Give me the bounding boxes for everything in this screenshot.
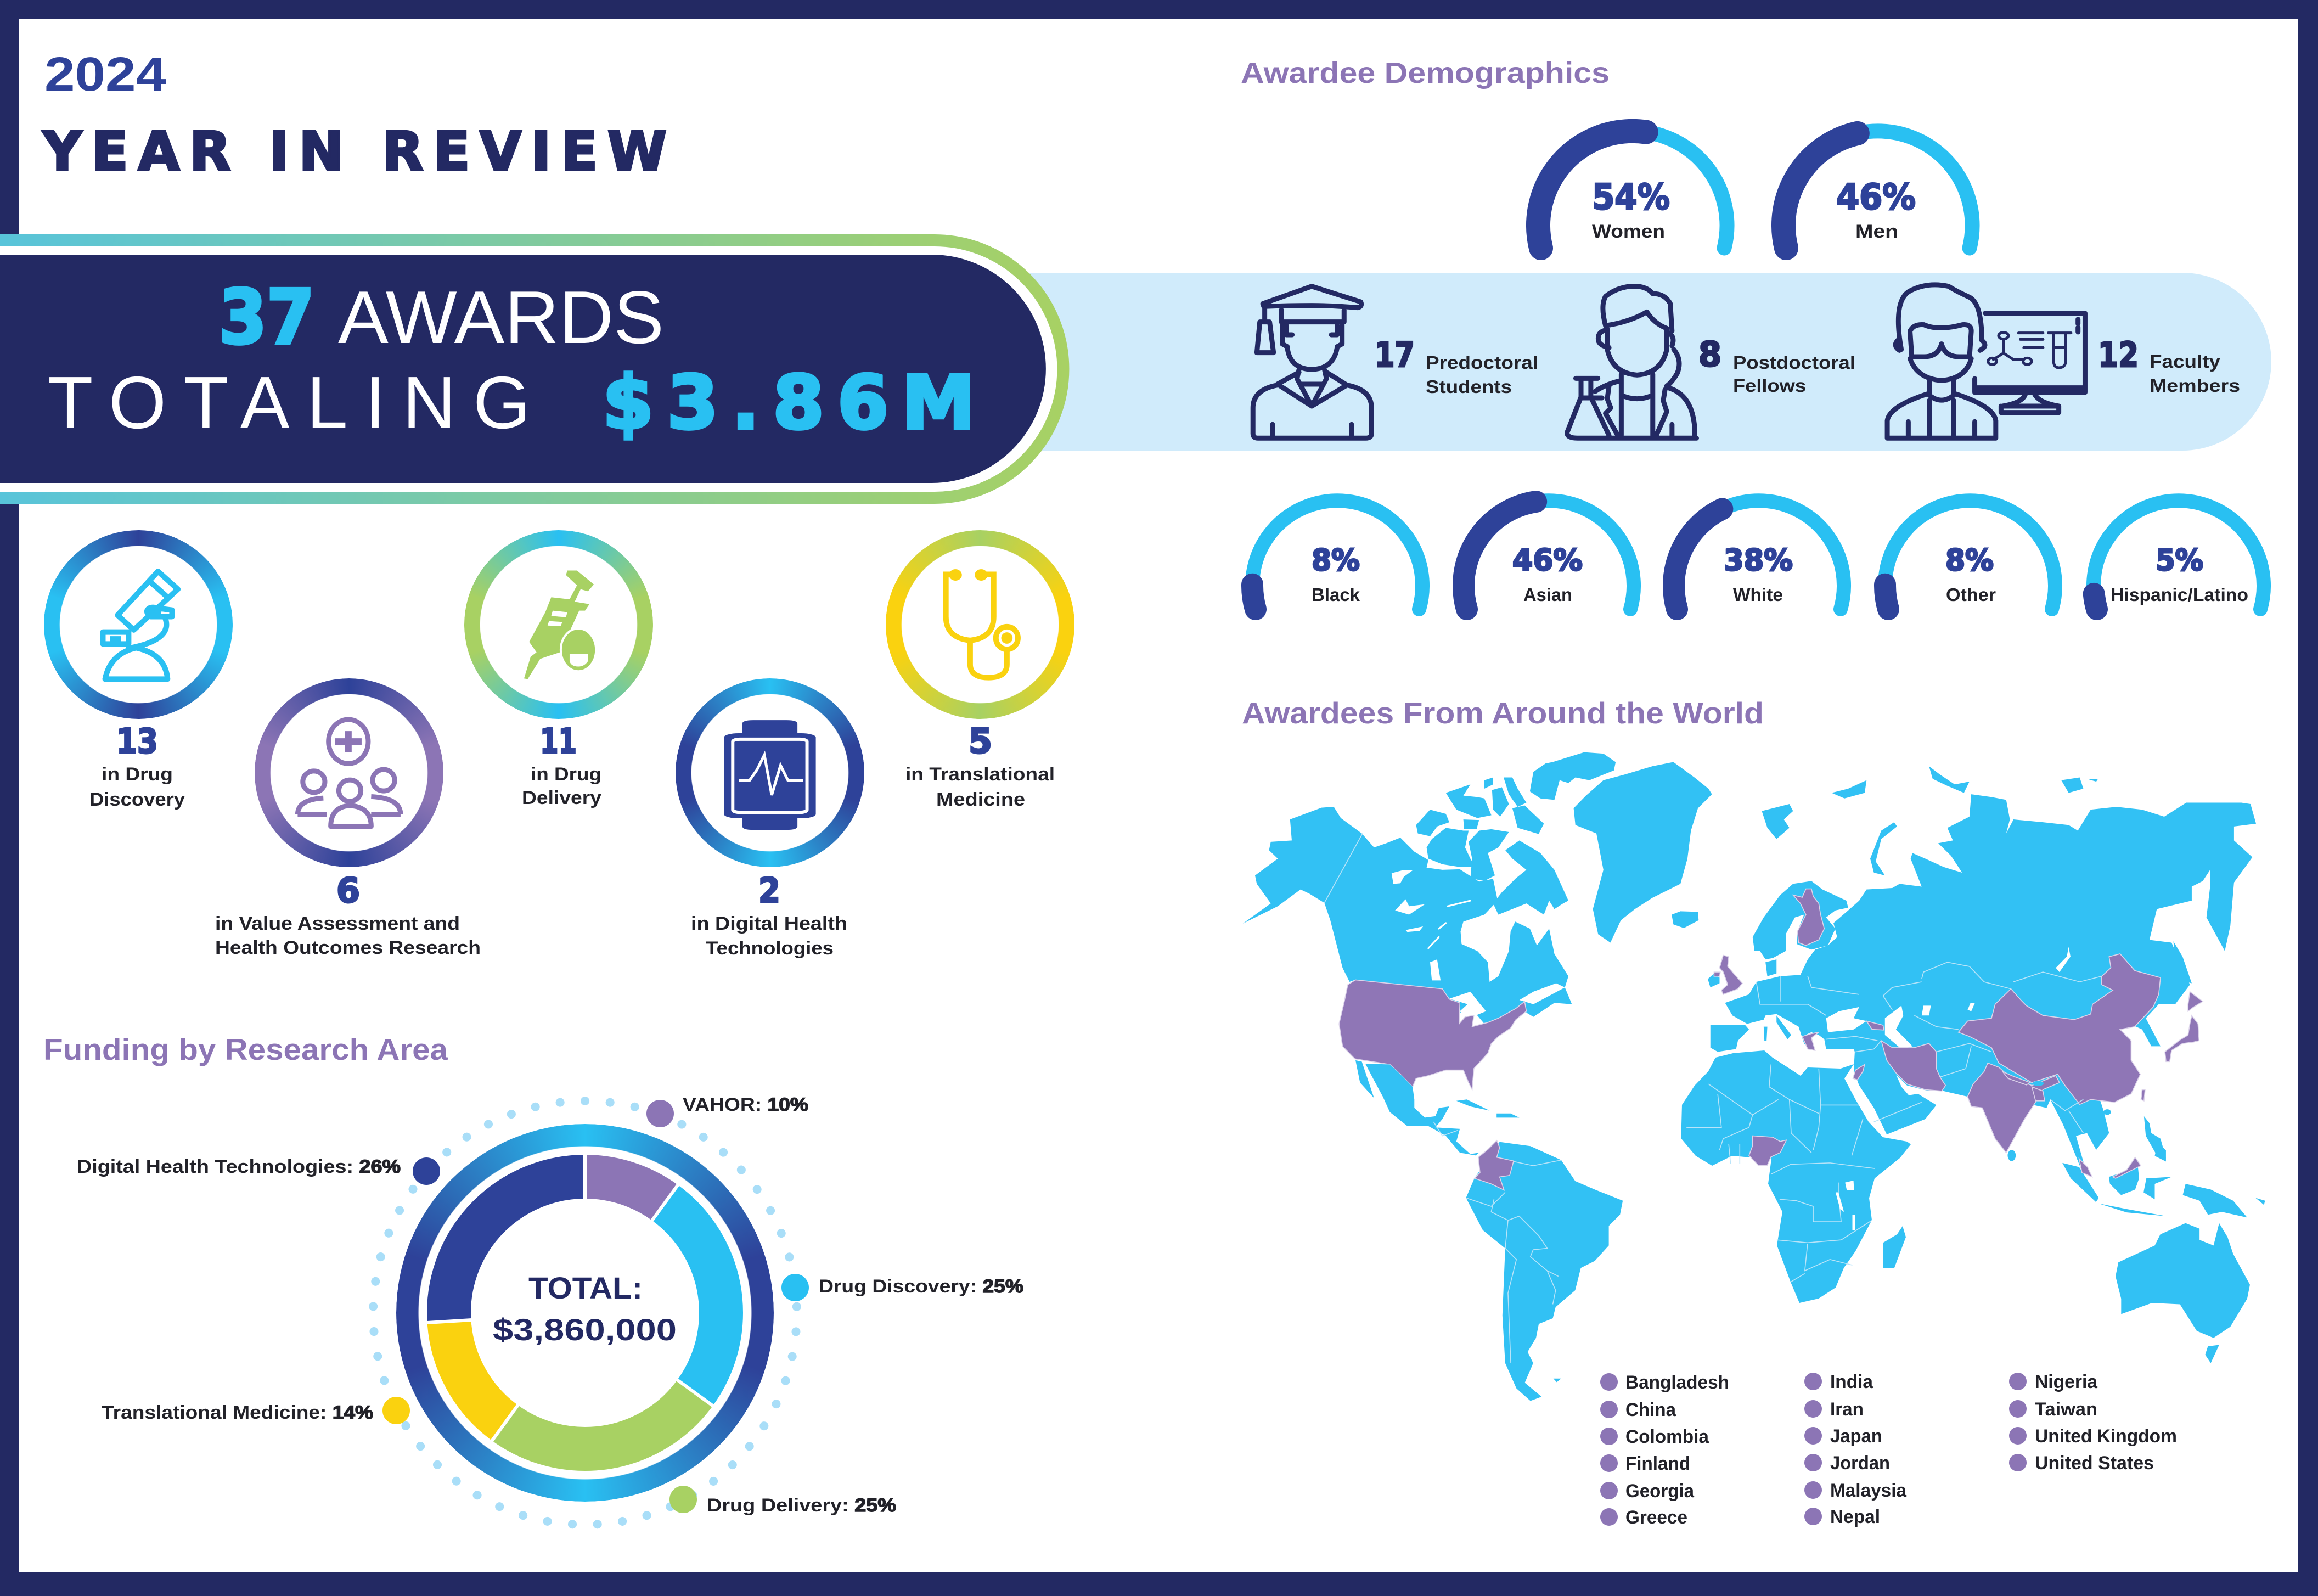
gauge: asian: Asian — [1523, 585, 1572, 605]
stat: drug discovery: in Drug — [102, 764, 173, 785]
legend: drug discovery: Drug Discovery: 25% — [819, 1276, 1023, 1297]
legend item: Iran: Iran — [1830, 1399, 1864, 1420]
stat: drug discovery: Discovery — [89, 789, 185, 810]
stat: postdoctoral: 8 — [1698, 334, 1721, 374]
map legend: column 3 — [2009, 1372, 2177, 1474]
ring: value assessment — [255, 678, 443, 867]
stat: predoctoral: Students — [1426, 376, 1512, 397]
map legend: column 2 — [1804, 1372, 1907, 1527]
gauge: black — [1252, 501, 1422, 609]
stat: value assessment: 6 — [336, 870, 360, 911]
legend item: Iran — [1804, 1399, 1864, 1420]
stat: drug delivery: 11 — [540, 721, 577, 761]
legend: VAHOR — [646, 1094, 808, 1127]
stat: value assessment: in Value Assessment and — [215, 913, 460, 934]
legend item: India — [1804, 1372, 1873, 1392]
legend item: United Kingdom: United Kingdom — [2035, 1426, 2177, 1447]
gauge: men: 46% — [1836, 177, 1916, 218]
gauge: men: Men — [1855, 221, 1898, 242]
map: africa detail — [1686, 1064, 1863, 1165]
stat: postdoctoral: Fellows — [1733, 375, 1806, 396]
gauge: women: 54% — [1592, 177, 1670, 218]
gauge: hispanic/latino: 5% — [2156, 543, 2203, 577]
icon: smart watch — [724, 720, 816, 830]
icon: stethoscope — [946, 572, 1018, 678]
ring: drug delivery — [464, 530, 653, 719]
map: north america and greenland — [1243, 752, 1712, 1155]
awards: AWARDS — [338, 276, 664, 359]
legend item: United States: United States — [2035, 1453, 2154, 1474]
stat: drug discovery — [89, 721, 185, 810]
totaling: TOTALING — [48, 361, 531, 444]
gauge: black: Black — [1312, 585, 1360, 605]
gauge: white: 38% — [1724, 543, 1793, 577]
legend: drug delivery — [669, 1486, 896, 1516]
stat: drug delivery: Delivery — [522, 788, 601, 808]
stat: translational medicine: in Translational — [905, 764, 1055, 785]
legend item: Colombia: Colombia — [1625, 1426, 1709, 1447]
stat: postdoctoral — [1698, 334, 1855, 396]
stat: translational medicine — [905, 721, 1055, 810]
legend: drug discovery — [781, 1274, 1023, 1301]
gauge: men — [1783, 131, 1972, 248]
stat: predoctoral: 17 — [1375, 335, 1415, 375]
stat: digital health: 2 — [758, 870, 780, 911]
demographics band — [988, 273, 2271, 451]
heading: YEAR IN REVIEW — [42, 121, 667, 183]
icon: graduate — [1253, 286, 1371, 438]
donut chart — [425, 1153, 721, 1449]
legend item: Malaysia: Malaysia — [1830, 1480, 1907, 1501]
stat: digital health: in Digital Health — [691, 913, 847, 934]
title block — [42, 48, 667, 183]
legend item: Nepal — [1804, 1507, 1880, 1527]
37: 37 — [219, 274, 314, 361]
legend: drug delivery: Drug Delivery: 25% — [707, 1495, 896, 1516]
legend item: Japan: Japan — [1830, 1426, 1882, 1447]
ring: digital health — [676, 678, 864, 867]
legend item: Greece: Greece — [1625, 1507, 1687, 1528]
icon: microscope — [103, 571, 178, 679]
gauge: white — [1674, 501, 1844, 609]
legend item: Nigeria: Nigeria — [2035, 1372, 2098, 1392]
legend item: China: China — [1625, 1400, 1676, 1420]
stat: postdoctoral: Postdoctoral — [1733, 352, 1855, 373]
gauge: women: Women — [1592, 221, 1665, 242]
map: south america — [1466, 1140, 1623, 1401]
gauge: hispanic/latino: Hispanic/Latino — [2111, 585, 2248, 605]
stat: faculty: Members — [2150, 375, 2240, 396]
year: 2024 — [44, 48, 166, 101]
ring: drug discovery — [44, 530, 233, 719]
icon: faculty with monitor — [1887, 285, 2085, 438]
legend item: China — [1600, 1400, 1676, 1420]
map: africa — [1681, 1050, 1911, 1303]
stat: faculty — [2098, 335, 2240, 396]
stat: drug delivery — [522, 721, 601, 808]
legend item: Finland: Finland — [1625, 1453, 1690, 1474]
stat: faculty: 12 — [2098, 335, 2139, 375]
world map — [1243, 752, 2265, 1401]
heading: funding by research area: Funding by Research Area — [43, 1032, 448, 1066]
map: eurasia — [1708, 766, 2256, 1174]
stat: drug discovery: 13 — [116, 721, 158, 761]
legend item: Jordan — [1804, 1453, 1890, 1474]
stat: translational medicine: 5 — [969, 721, 992, 761]
gauge: women — [1538, 131, 1727, 248]
heading: awardee demographics: Awardee Demographics — [1241, 57, 1610, 89]
gauge: other: Other — [1946, 585, 1996, 605]
legend item: India: India — [1830, 1372, 1873, 1392]
map: southeast asia and oceania — [2062, 1142, 2265, 1363]
legend item: Nepal: Nepal — [1830, 1507, 1880, 1527]
legend item: Bangladesh: Bangladesh — [1625, 1372, 1729, 1393]
stat: digital health: Technologies — [706, 938, 834, 959]
donut total: TOTAL: — [528, 1271, 643, 1305]
stat: translational medicine: Medicine — [936, 789, 1025, 810]
gauge: asian — [1464, 501, 1634, 609]
gauge: hispanic/latino — [2094, 501, 2264, 609]
gauge: black: 8% — [1312, 543, 1360, 577]
ring: translational medicine — [886, 530, 1074, 719]
legend: digital health technologies: Digital Health Technologies: 26% — [77, 1156, 401, 1177]
stat: predoctoral: Predoctoral — [1426, 352, 1538, 373]
banner outline — [0, 240, 1063, 498]
donut total — [493, 1271, 677, 1347]
gauge: other — [1885, 501, 2055, 609]
legend item: Taiwan: Taiwan — [2035, 1399, 2097, 1420]
legend: translational medicine: Translational Medicine: 14% — [102, 1402, 373, 1423]
legend item: Georgia: Georgia — [1625, 1481, 1695, 1502]
banner fill — [0, 255, 1046, 483]
stat: value assessment: Health Outcomes Research — [215, 937, 481, 958]
donut outer gradient ring — [396, 1124, 774, 1502]
stat: digital health — [691, 870, 847, 959]
stat: drug delivery: in Drug — [531, 764, 601, 785]
map: central and southern africa detail — [1771, 1163, 1875, 1282]
legend item: Jordan: Jordan — [1830, 1453, 1890, 1474]
stat: faculty: Faculty — [2150, 351, 2221, 372]
gauge: other: 8% — [1945, 543, 1994, 577]
heading: awardees from around the world: Awardees From Around the World — [1242, 696, 1764, 730]
legend: translational medicine — [102, 1397, 410, 1424]
banner: awards total — [0, 240, 1063, 498]
legend: digital health technologies — [77, 1156, 440, 1185]
legend item: Japan — [1804, 1426, 1882, 1447]
amount: $3.86M — [603, 360, 975, 446]
icon: postdoc with flask — [1567, 286, 1696, 438]
stat: predoctoral — [1375, 335, 1538, 397]
gauge: white: White — [1733, 585, 1783, 605]
stat: value assessment — [215, 870, 481, 958]
map legend: column 1 — [1600, 1372, 1729, 1528]
icon: syringe and pill — [524, 570, 596, 679]
gauge: asian: 46% — [1512, 543, 1583, 577]
legend: VAHOR: VAHOR: 10% — [683, 1094, 808, 1115]
donut total: $3,860,000 — [493, 1312, 677, 1347]
icon: people with plus — [297, 720, 401, 827]
donut dot ring — [373, 1101, 797, 1525]
map: madagascar — [1883, 1226, 1906, 1268]
